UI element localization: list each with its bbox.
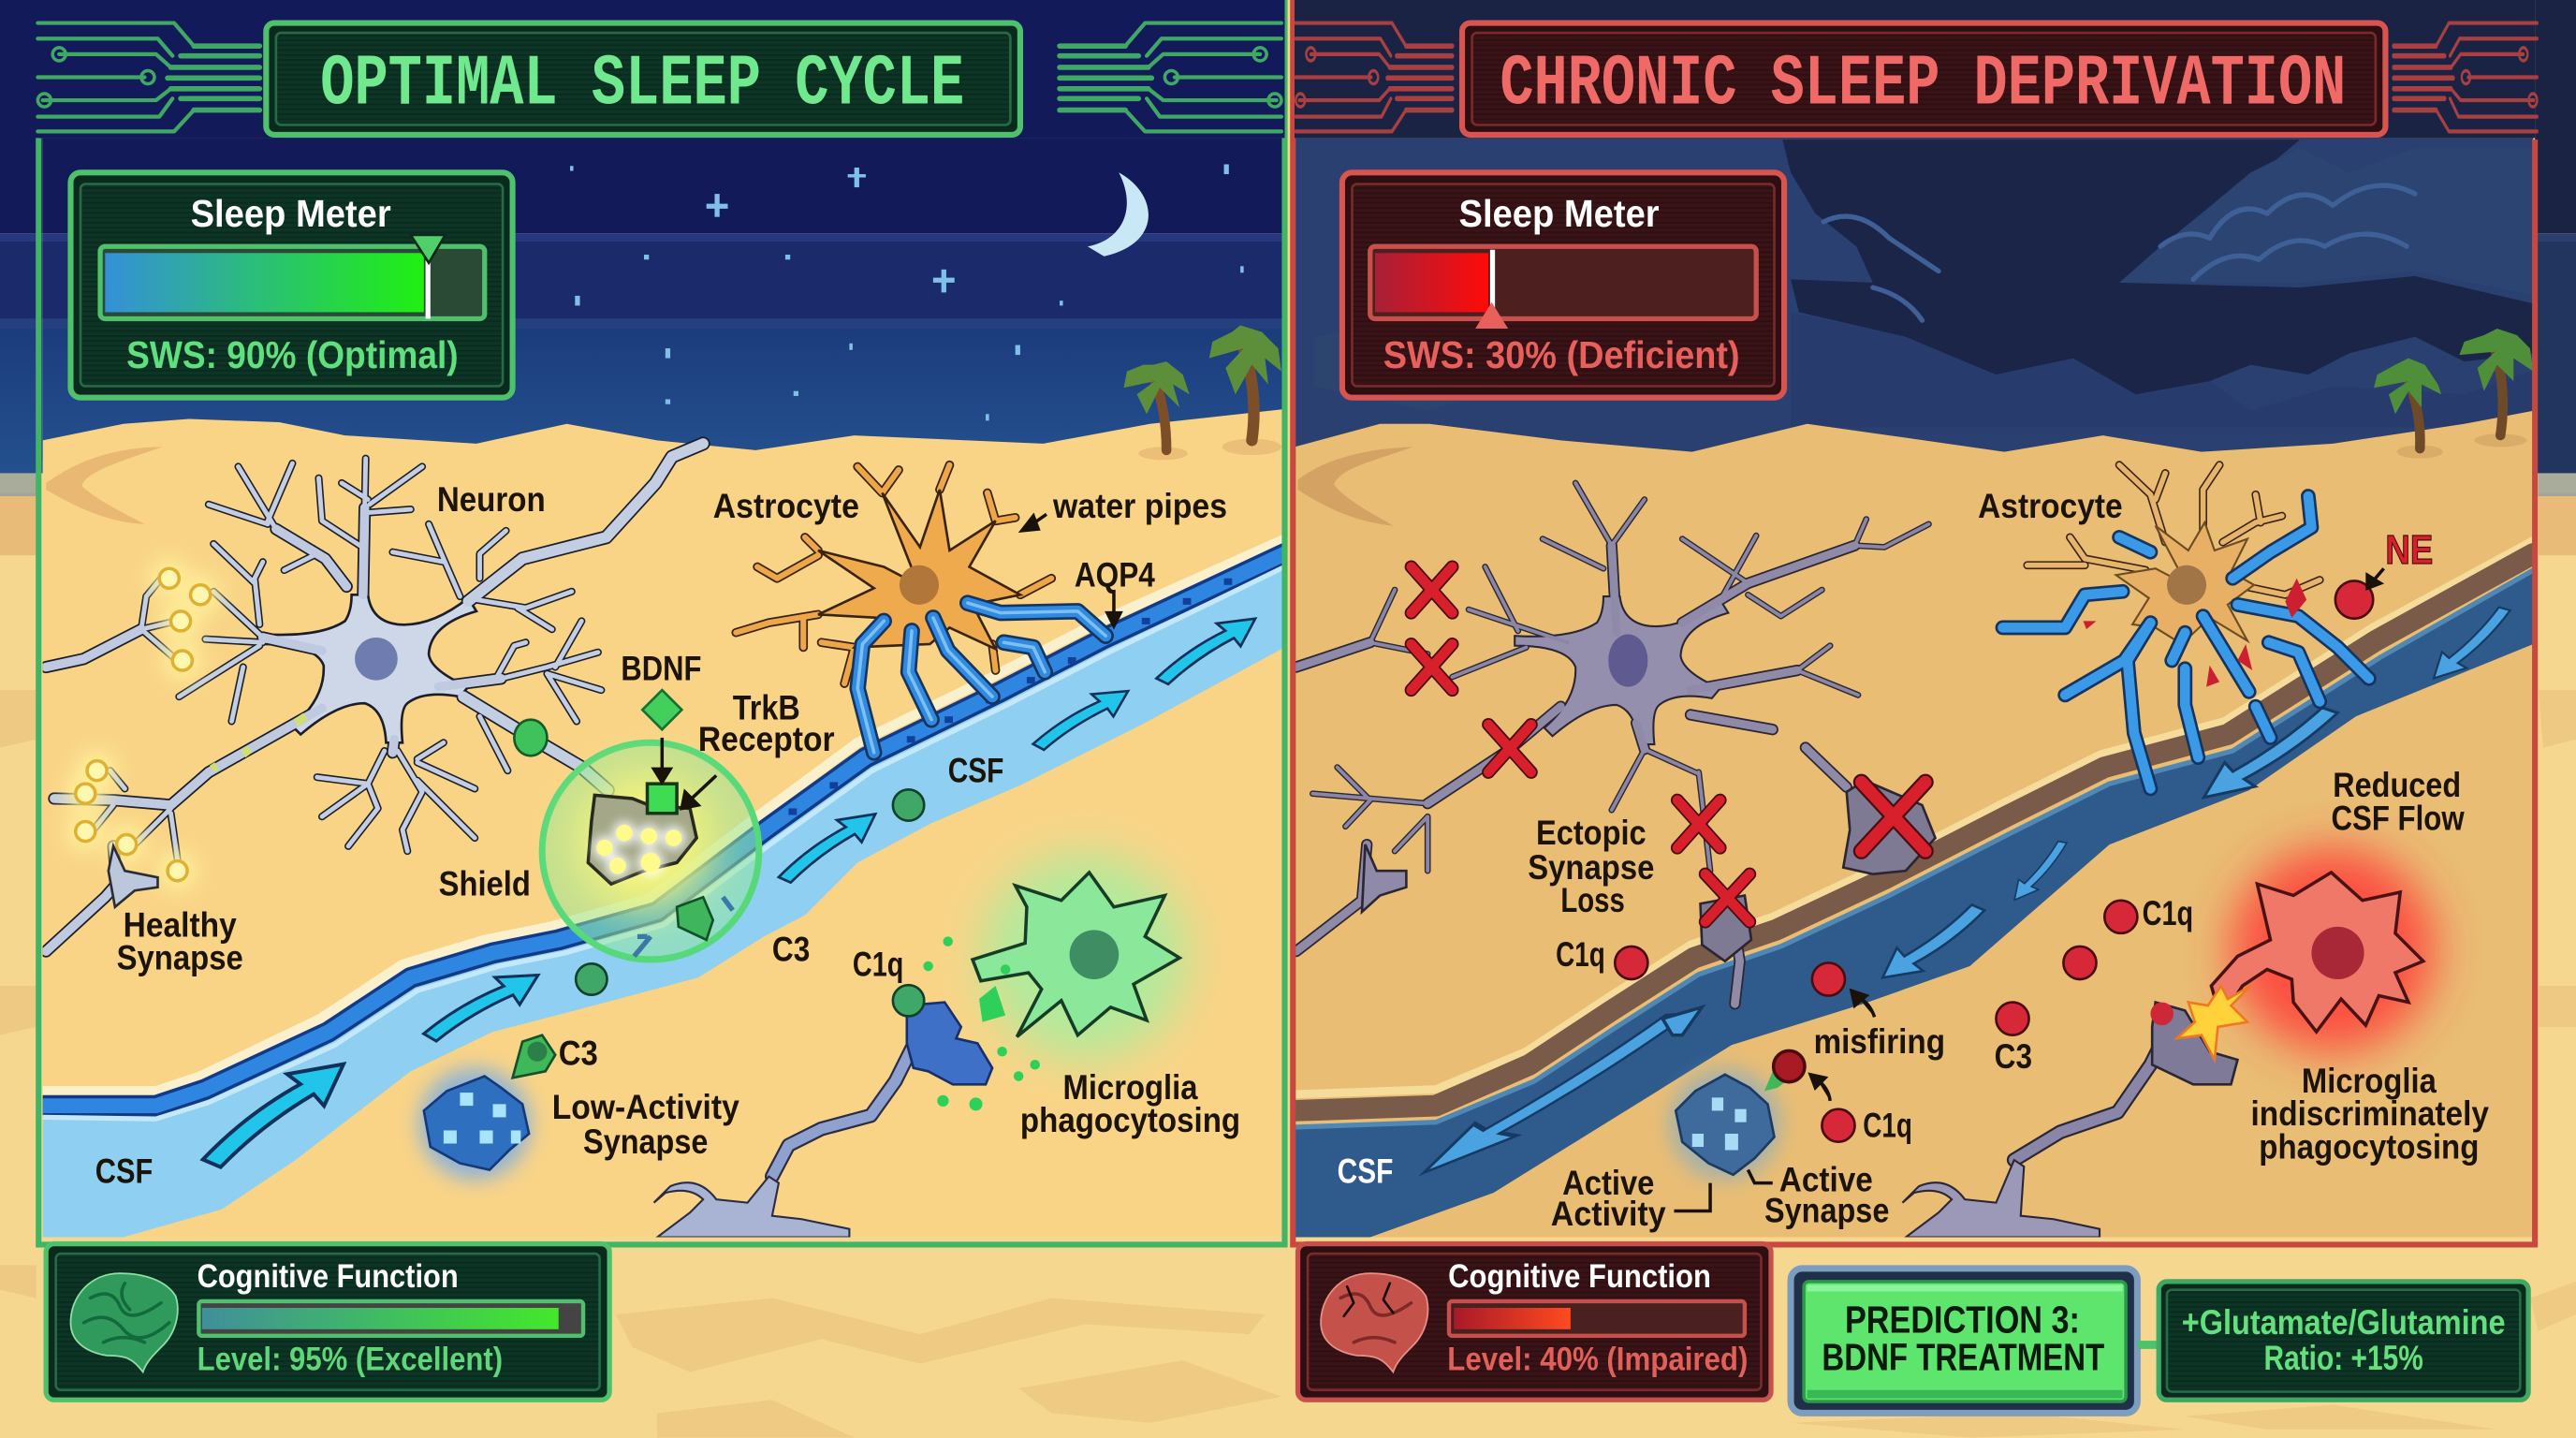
label: Active Synapse: Synapse [1764,1192,1889,1230]
reduced CSF flow arrows [1413,603,2523,1184]
icon: NE ball [2335,580,2373,619]
glutamate ratio box: +Glutamate/Glutamine [2182,1303,2506,1342]
label: C1q left: C1q [1556,935,1605,974]
label: Reduced CSF Flow: CSF Flow [2331,799,2465,837]
label: Active Activity: Activity [1551,1195,1666,1233]
sand dunes [1295,411,2533,1249]
label: Microglia indiscriminately phagocytosing [2250,1062,2489,1166]
cognitive function: impaired [1298,1244,1771,1400]
prediction 3 box: PREDICTION 3: [1845,1298,2080,1341]
circuit traces: right panel right [2393,23,2537,131]
label: TrkB Receptor [698,689,835,758]
label: C1q right: C1q [2143,894,2193,932]
panel frame: optimal [38,0,1284,1244]
shield with protected synapse [542,742,759,960]
label: misfiring: misfiring [1814,1022,1945,1061]
label: Ectopic Synapse Loss: Ectopic [1536,814,1647,852]
palm trees [1123,325,1281,460]
label: Microglia indiscriminately phagocytosing: indiscriminately [2250,1094,2489,1133]
icon: BDNF diamond [642,690,681,729]
label: C1q bottom: C1q [1863,1106,1912,1144]
icon: TrkB receptor [648,784,677,814]
label: Reduced CSF Flow [2331,766,2465,837]
label: TrkB Receptor: Receptor [698,720,835,758]
meter title: Sleep Meter [1459,192,1660,235]
C1q and complement balls [1615,901,2137,1142]
panel frame: deprivation [1293,0,2535,1244]
label: Active Synapse: Active [1779,1160,1873,1198]
sand crescent [46,447,163,524]
meter reading: SWS: 30% (Deficient) [1383,333,1740,376]
cognitive reading: Level: 40% (Impaired) [1447,1342,1748,1378]
label: AQP4: AQP4 [1075,556,1155,594]
title: optimal sleep cycle [266,23,1020,135]
label: Low-Activity Synapse [552,1088,739,1161]
label: Microglia phagocytosing: phagocytosing [1020,1101,1240,1139]
astrocyte with water pipes [736,465,1105,753]
microglia [973,855,1186,1058]
cognitive title: Cognitive Function [1448,1258,1711,1295]
waste particles in CSF [576,789,924,995]
label: Ectopic Synapse Loss: Synapse [1528,848,1654,887]
stars [570,165,1244,420]
label: BDNF: BDNF [621,650,701,688]
second neuron attacked by microglia [1902,1003,2237,1238]
night sky [43,138,1282,461]
icon: C3 tag [513,1035,555,1078]
label: Neuron: Neuron [437,480,546,519]
arrow: misfiring [1852,990,1875,1017]
lost synapse markers [1412,566,1925,922]
arrow: AQP4 [1107,594,1120,626]
label: Healthy Synapse: Synapse [117,938,243,976]
panel: optimal sleep cycle scene [43,138,1282,1238]
low-activity synapse [419,1068,531,1180]
sand crescent [1298,447,1412,526]
label: Reduced CSF Flow: Reduced [2333,766,2461,804]
sleep meter: optimal [70,172,513,398]
label: Ectopic Synapse Loss: Loss [1560,881,1625,919]
icon: green brain [70,1273,178,1372]
label: Active Synapse [1764,1160,1889,1230]
left sky strip [0,0,43,496]
label: Microglia indiscriminately phagocytosing: phagocytosing [2259,1127,2479,1166]
meter reading: SWS: 90% (Optimal) [126,333,459,376]
cognitive title: Cognitive Function [198,1258,459,1295]
cognitive function: excellent [46,1244,609,1400]
prediction 3 box: BDNF TREATMENT [1822,1336,2105,1379]
active synapse [1669,1068,1781,1180]
cognitive reading: Level: 95% (Excellent) [198,1342,503,1378]
marker: green receptor on neuron [514,720,547,756]
label: Healthy Synapse: Healthy [124,905,237,944]
misfiring C3 tag [1764,1050,1805,1091]
circuit traces: right panel left [1295,23,1453,131]
label: Microglia phagocytosing [1020,1068,1240,1139]
right sky strip [2535,0,2576,496]
label: Healthy Synapse [117,905,243,976]
glutamate ratio box: Ratio: +15% [2264,1339,2423,1377]
label: Active Activity: Active [1562,1164,1654,1202]
label: Low-Activity Synapse: Low-Activity [552,1088,739,1126]
neuron [46,444,703,951]
palm trees [2374,329,2533,459]
label: C3 tag: C3 [559,1034,598,1072]
dried CSF river [1295,540,2533,1238]
label: Low-Activity Synapse: Synapse [583,1123,708,1161]
label: Astrocyte: Astrocyte [713,487,859,525]
arrow: water pipes [1022,514,1046,531]
icon: cracked brain [1321,1273,1427,1372]
CSF river [43,539,1284,1238]
panel: chronic sleep deprivation scene [1295,138,2535,1249]
arrow: BDNF to receptor [654,738,670,782]
label: CSF lower: CSF [95,1152,153,1191]
arrow: TrkB to receptor [681,775,716,808]
label: Microglia indiscriminately phagocytosing: Microglia [2302,1062,2437,1100]
circuit traces: left panel left [37,23,259,131]
title: chronic sleep deprivation: CHRONIC SLEEP DEPRIVATION [1500,45,2346,126]
meter title: Sleep Meter [191,192,391,235]
callout line: Active Activity [1674,1183,1710,1211]
label: C3 river: C3 [772,931,810,969]
prediction 3 box [1791,1269,2137,1413]
title: chronic sleep deprivation [1462,23,2385,135]
damaged neuron [1296,483,1936,1004]
header band right [1295,0,2535,138]
callout line: Active Synapse [1748,1170,1773,1183]
label: NE: NE [2385,527,2433,573]
meter bar [100,235,485,318]
circuit traces: left panel right [1060,23,1281,131]
cognitive bar [198,1301,583,1336]
label: CSF upper: CSF [948,751,1003,789]
glutamate ratio box [2159,1282,2528,1400]
title: optimal sleep cycle: OPTIMAL SLEEP CYCLE [320,45,964,126]
connector [2137,1341,2159,1349]
label: C3: C3 [1995,1037,2032,1076]
label: Ectopic Synapse Loss [1528,814,1654,919]
healthy synapse glows [66,559,220,907]
AQP4 channels [788,579,1232,814]
arrow: NE to ball [2367,568,2384,588]
icon: crescent moon [1088,172,1149,257]
microglia indiscriminately phagocytosing [2211,848,2435,1051]
header band left [39,0,1284,138]
label: Microglia phagocytosing: Microglia [1063,1068,1198,1107]
sleep meter: deficient [1342,172,1784,398]
meter bar [1370,246,1756,329]
sand dunes [43,409,1282,474]
label: CSF white: CSF [1338,1152,1393,1191]
arrow: C1q to tag [1810,1075,1830,1101]
label: C1q: C1q [853,945,903,983]
astrocyte with broken pipes [2002,465,2369,788]
icon: impact starburst [2177,986,2250,1060]
label: water pipes: water pipes [1052,487,1227,525]
second neuron with tagged synapse [654,936,1040,1238]
label: TrkB Receptor: TrkB [733,689,800,727]
label: Shield: Shield [439,864,531,902]
label: Active Activity [1551,1164,1666,1233]
CSF flow arrows [186,608,1265,1173]
storm sky [1295,138,2535,466]
label: Astrocyte damaged: Astrocyte [1978,487,2123,525]
cognitive bar [1449,1301,1745,1336]
